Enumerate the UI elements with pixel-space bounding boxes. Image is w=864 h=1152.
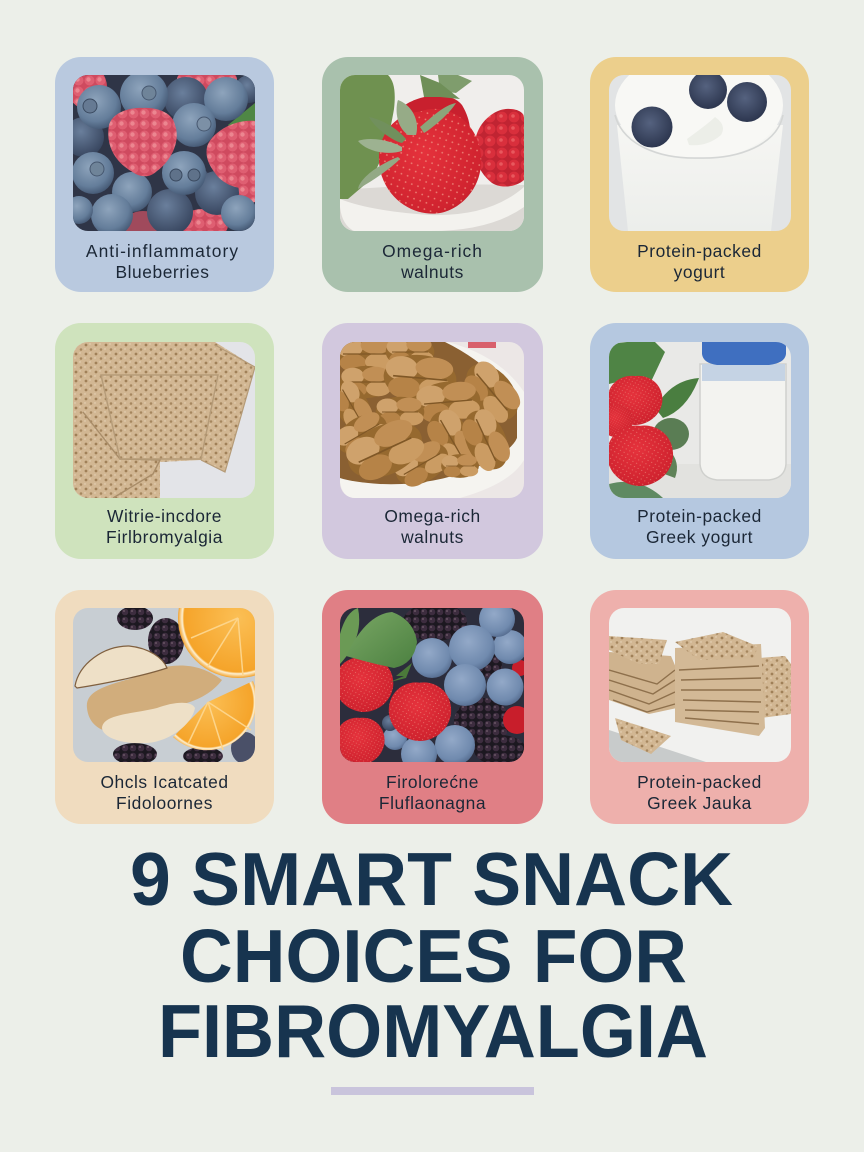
- image: mixed berries with leaves: [340, 608, 524, 762]
- label: [100, 772, 229, 813]
- label: Greek Jauka: [647, 793, 752, 813]
- label: Protein-packed: [637, 241, 762, 261]
- card: protein-packed crackers: [590, 590, 809, 824]
- card: protein-packed yogurt: [590, 57, 809, 292]
- label: Firolorećne: [386, 772, 479, 792]
- label: Ohcls Icatcated: [100, 772, 229, 792]
- image: yogurt jar with strawberries: [609, 342, 791, 498]
- image: blueberries and raspberries: [73, 75, 255, 231]
- label: Omega-rich: [384, 506, 481, 526]
- image: walnuts in a white bowl: [340, 342, 524, 498]
- label: walnuts: [401, 262, 464, 282]
- card: omega-rich nuts and orange: [55, 590, 274, 824]
- image: stacks of crackers: [609, 608, 791, 762]
- label: Omega-rich: [382, 241, 483, 261]
- label: Protein-packed: [637, 772, 762, 792]
- card: omega-rich walnuts (strawberries): [322, 57, 543, 292]
- image: stacked crackers: [73, 342, 255, 498]
- title: [130, 840, 733, 1070]
- label: Protein-packed: [637, 506, 762, 526]
- label: [637, 241, 762, 282]
- label: Anti-inflammatory: [86, 241, 239, 261]
- label: yogurt: [674, 262, 725, 282]
- label: [86, 241, 239, 282]
- label: Witrie-incdore: [107, 506, 222, 526]
- label: [382, 241, 483, 282]
- label: Fidoloornes: [116, 793, 213, 813]
- label: Blueberries: [115, 262, 210, 282]
- label: [637, 772, 762, 813]
- label: [637, 506, 762, 547]
- strawberry crown leaves: [358, 75, 460, 189]
- card: whole-grain crackers: [55, 323, 274, 559]
- label: [106, 506, 223, 547]
- label: walnuts: [401, 527, 464, 547]
- label: [384, 506, 481, 547]
- label: Firlbromyalgia: [106, 527, 223, 547]
- image: glass of yogurt with blueberries: [609, 75, 791, 231]
- image: brazil nuts, oranges and blackberries: [73, 608, 255, 762]
- title: CHOICES FOR: [180, 914, 687, 998]
- card: protein-packed greek yogurt: [590, 323, 809, 559]
- label: [379, 772, 486, 813]
- accent bar: [331, 1087, 534, 1095]
- card: berries: [322, 590, 543, 824]
- label: Fluflaonagna: [379, 793, 486, 813]
- image: strawberries in a white bowl: [340, 75, 524, 231]
- card: anti-inflammatory blueberries: [55, 57, 274, 292]
- card: omega-rich walnuts: [322, 323, 543, 559]
- label: Greek yogurt: [646, 527, 753, 547]
